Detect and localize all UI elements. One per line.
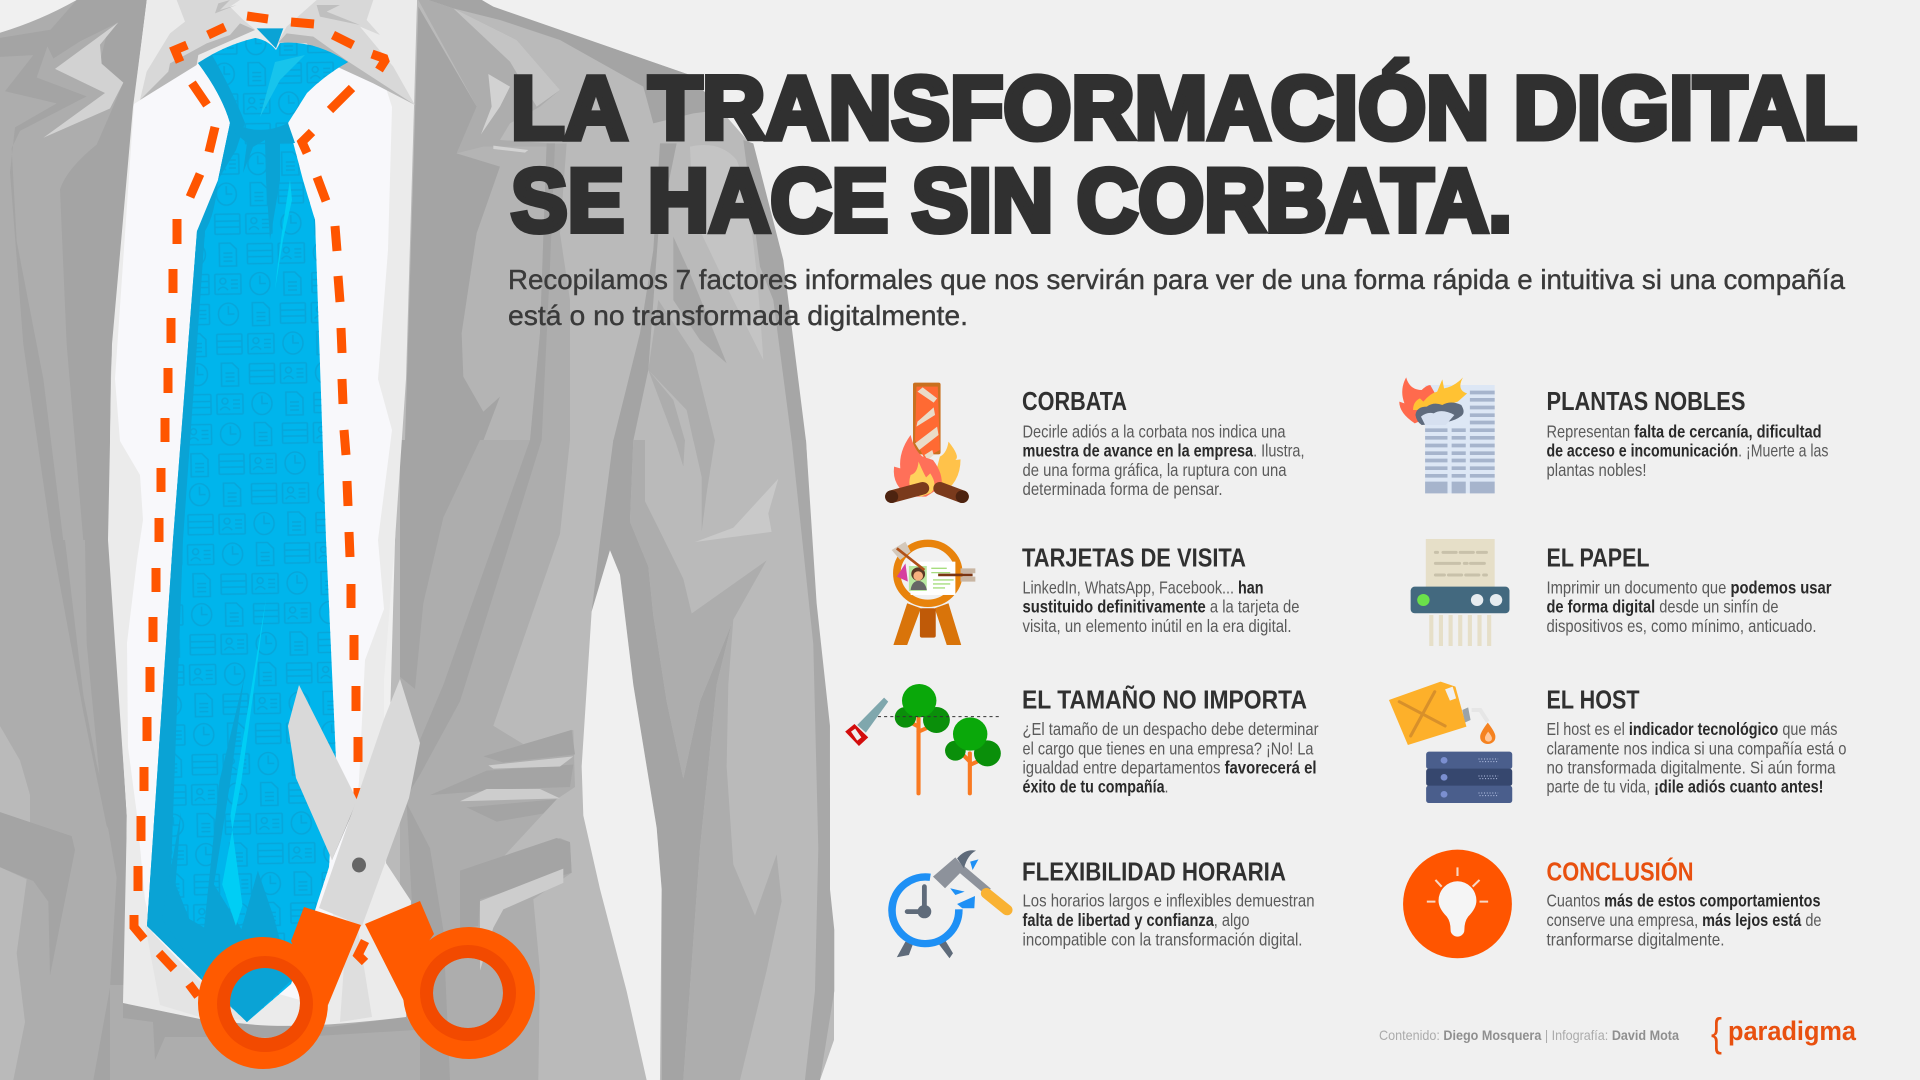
section: flexibilidad horaria: Los horarios largos e inflexibles demuestran [1022, 891, 1314, 911]
section: flexibilidad horaria [1022, 857, 1314, 949]
section: el papel [1546, 543, 1832, 636]
section: el host: no transformada digitalmente. Si aún forma [1546, 758, 1836, 778]
credits: Contenido: Diego Mosquera | Infografía: David Mota [1379, 1027, 1679, 1043]
title: SE HACE SIN CORBATA. [511, 150, 1512, 250]
section: conclusión: tranformarse digitalmente. [1546, 929, 1724, 949]
icon: saw and trees [845, 684, 1001, 793]
section: el host [1546, 685, 1846, 797]
right handle [365, 901, 535, 1059]
logo: paradigma: paradigma [1728, 1016, 1857, 1046]
section: corbata: Decirle adiós a la corbata nos indica una [1022, 421, 1286, 441]
icon: broken clock and hammer [892, 850, 1007, 958]
right blade [319, 679, 420, 926]
section: corbata: determinada forma de pensar. [1022, 479, 1222, 499]
shirt [108, 0, 417, 1026]
icon: business card target [892, 542, 975, 645]
section: conclusión: CONCLUSIÓN [1546, 857, 1694, 887]
left blade [288, 685, 357, 860]
section: plantas nobles [1546, 386, 1829, 480]
section: el host: EL HOST [1546, 685, 1640, 715]
subtitle [508, 264, 1846, 331]
pivot [352, 858, 366, 872]
section: el tamaño no importa: ¿El tamaño de un despacho debe determinar [1022, 719, 1319, 739]
icon: burning building [1399, 377, 1495, 493]
section: el tamaño no importa [1022, 685, 1319, 797]
section: el host: El host es el indicador tecnológico que más [1546, 719, 1838, 739]
section: tarjetas de visita: sustituido definitivamente a la tarjeta de [1022, 596, 1300, 616]
icon: fuel can and server [1389, 682, 1512, 803]
section: flexibilidad horaria: FLEXIBILIDAD HORARIA [1022, 857, 1286, 887]
logo: paradigma: { [1711, 1011, 1722, 1055]
logo: paradigma [1711, 1011, 1857, 1055]
collar [140, 0, 415, 105]
title: LA TRANSFORMACIÓN DIGITAL [511, 58, 1857, 158]
section: flexibilidad horaria: falta de libertad y confianza, algo [1022, 910, 1250, 930]
title [511, 58, 1857, 250]
section: plantas nobles: PLANTAS NOBLES [1546, 386, 1746, 416]
section: corbata: de una forma gráfica, la ruptura con una [1022, 460, 1287, 480]
section: el papel: Imprimir un documento que podemos usar [1546, 577, 1832, 597]
icon: burning tie [885, 383, 969, 503]
section: tarjetas de visita: visita, un elemento inútil en la era digital. [1022, 616, 1292, 636]
icon: light bulb [1403, 850, 1512, 958]
section: plantas nobles: de acceso e incomunicación. ¡Muerte a las [1546, 441, 1829, 461]
section: tarjetas de visita: LinkedIn, WhatsApp, Facebook... han [1022, 577, 1264, 597]
section: el papel: EL PAPEL [1546, 543, 1650, 573]
section: tarjetas de visita [1022, 543, 1300, 636]
section: corbata: CORBATA [1022, 386, 1127, 416]
tie [147, 38, 348, 1022]
section: tarjetas de visita: TARJETAS DE VISITA [1022, 543, 1246, 573]
section: el tamaño no importa: el cargo que tienes en una empresa? ¡No! La [1022, 738, 1314, 758]
icon: paper shredder [1411, 539, 1509, 646]
section: conclusión: Cuantos más de estos comportamientos [1546, 891, 1821, 911]
section: conclusión [1546, 857, 1822, 949]
section: plantas nobles: Representan falta de cercanía, dificultad [1546, 421, 1822, 441]
section: el tamaño no importa: igualdad entre departamentos favorecerá el [1022, 758, 1316, 778]
section: el papel: dispositivos es, como mínimo, anticuado. [1546, 616, 1816, 636]
section: el host: claramente nos indica si una compañía está o [1546, 738, 1846, 758]
section: el papel: de forma digital desde un sinfín de [1546, 596, 1778, 616]
section: plantas nobles: plantas nobles! [1546, 460, 1646, 480]
subtitle: Recopilamos 7 factores informales que nos servirán para ver de una forma rápida e intuitiva si una compañía [508, 264, 1846, 295]
section: corbata [1022, 386, 1304, 499]
section: el tamaño no importa: EL TAMAÑO NO IMPORTA [1022, 685, 1307, 715]
section: el tamaño no importa: éxito de tu compañía. [1022, 777, 1168, 797]
jacket: right side and arm [380, 0, 834, 1080]
section: conclusión: conserve una empresa, más lejos está de [1546, 910, 1822, 930]
section: flexibilidad horaria: incompatible con la transformación digital. [1022, 929, 1302, 949]
scissors [198, 679, 535, 1069]
jacket: below the shirt [110, 985, 420, 1080]
left handle [198, 907, 361, 1069]
jacket: left side [0, 0, 147, 1080]
cut line: orange dashes [134, 16, 386, 996]
section: el host: parte de tu vida, ¡dile adiós cuanto antes! [1546, 777, 1824, 797]
subtitle: está o no transformada digitalmente. [508, 300, 968, 331]
section: corbata: muestra de avance en la empresa. Ilustra, [1022, 441, 1304, 461]
